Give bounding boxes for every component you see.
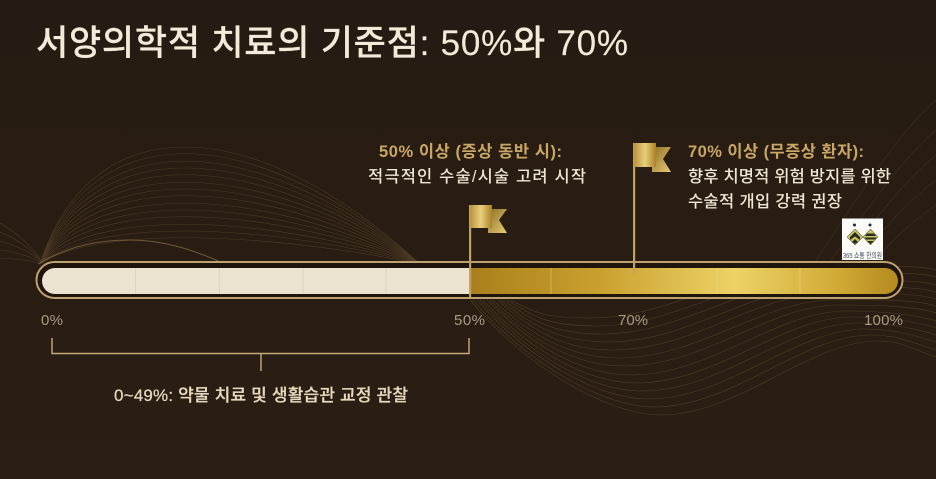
axis labels: 100% xyxy=(864,312,903,329)
logo: 365 clinic xyxy=(842,218,883,260)
axis labels: 50% xyxy=(454,312,485,329)
progress bar xyxy=(36,262,902,298)
axis labels: 0% xyxy=(41,312,63,329)
callout: 70% threshold xyxy=(688,142,891,211)
gold segment: 50-100% xyxy=(469,268,898,294)
flag: 70% marker xyxy=(633,143,671,273)
bracket: 0-49% range xyxy=(52,338,469,371)
flag: 50% marker xyxy=(469,205,507,297)
axis labels: 70% xyxy=(618,312,648,329)
callout heading: 70%: 70% 이상 (무증상 환자): xyxy=(688,142,864,161)
callout body: 70%: 향후 치명적 위험 방지를 위한 xyxy=(688,167,891,186)
callout heading: 50%: 50% 이상 (증상 동반 시): xyxy=(379,142,562,161)
range caption: 0~49%: 약물 치료 및 생활습관 교정 관찰 xyxy=(114,386,408,405)
callout body: 70%: 수술적 개입 강력 권장 xyxy=(688,192,842,211)
bar outline xyxy=(36,262,902,298)
title: 서양의학적 치료의 기준점: 50%와 70% xyxy=(36,24,628,63)
callout: 50% threshold xyxy=(368,142,586,186)
logo: 365 clinic: 365 쇼통 한의원 xyxy=(843,250,882,260)
cream segment: 0-50% xyxy=(42,268,469,294)
callout body: 50%: 적극적인 수술/시술 고려 시작 xyxy=(368,167,586,186)
axis labels xyxy=(41,312,903,329)
callout body: 70% xyxy=(688,167,891,211)
